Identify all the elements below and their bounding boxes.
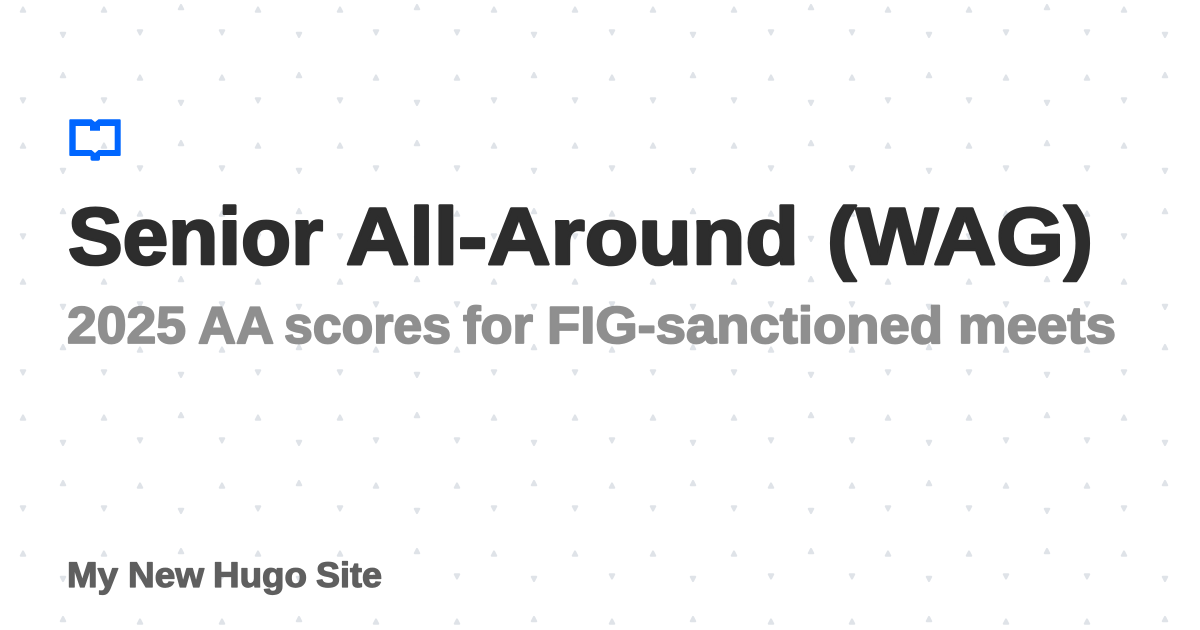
- title: Senior: [68, 192, 323, 282]
- title: (WAG): [827, 192, 1093, 282]
- subtitle: FIG-sanctioned: [547, 297, 943, 355]
- subtitle: AA: [198, 297, 273, 355]
- subtitle: for: [463, 297, 533, 355]
- site name footer: Hugo: [213, 556, 307, 595]
- site name footer: Site: [316, 556, 382, 595]
- site name footer: New: [128, 556, 205, 595]
- subtitle: 2025: [67, 297, 186, 355]
- subtitle: meets: [958, 297, 1116, 355]
- subtitle: scores: [284, 297, 451, 355]
- icon: open book logo: [69, 119, 121, 161]
- site name footer: My: [67, 556, 119, 595]
- title: All-Around: [346, 192, 799, 282]
